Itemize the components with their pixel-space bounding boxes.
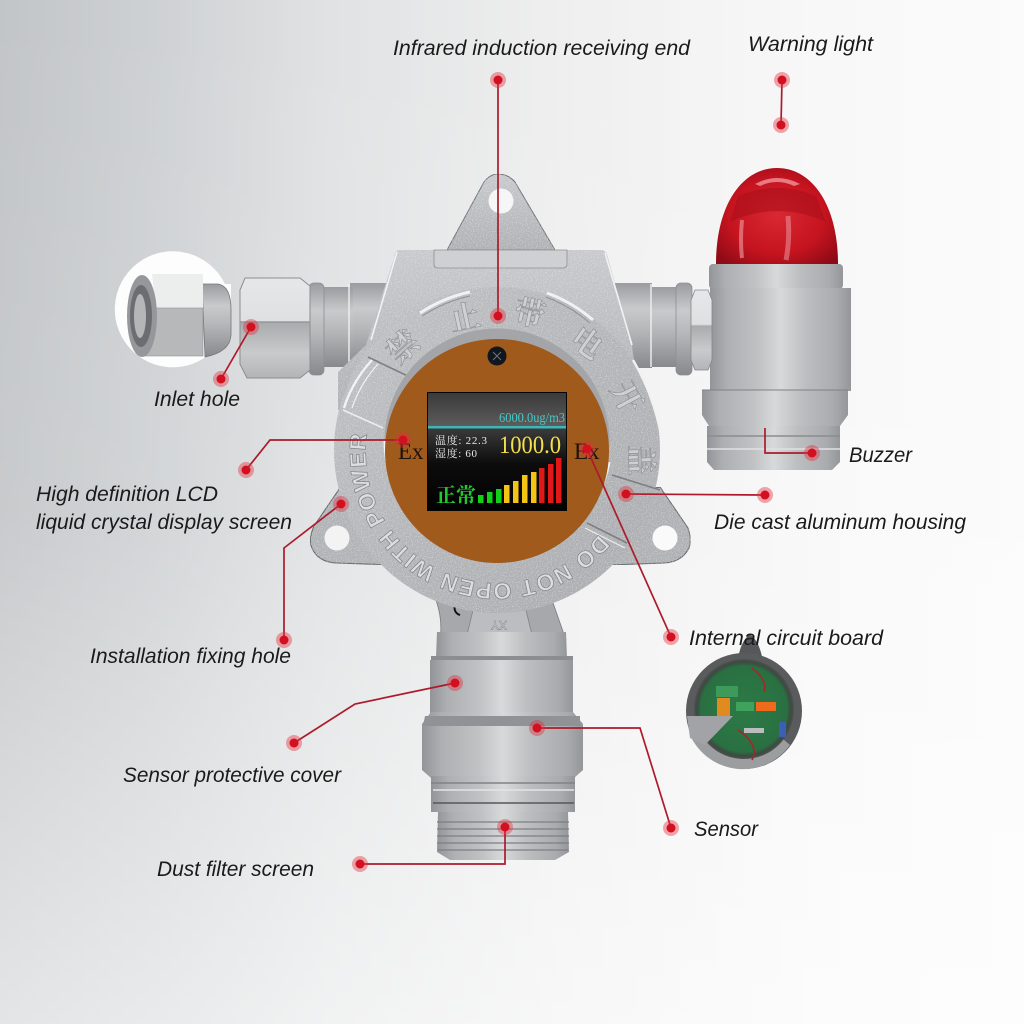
embossed warning characters	[375, 285, 667, 476]
internal circuit board	[686, 634, 802, 769]
embossed warning characters: 禁	[375, 317, 429, 372]
callout: inlet hole	[213, 319, 259, 387]
LCD status: 正常	[436, 479, 476, 508]
callout: die cast housing	[618, 486, 773, 503]
LCD temperature and humidity: 湿度: 60	[435, 446, 478, 460]
label: installation fixing hole: Installation fixing hole	[90, 645, 291, 668]
upper inner bevel	[384, 328, 610, 554]
ring segment dividers	[343, 357, 660, 548]
inlet pipe left	[309, 283, 390, 375]
label: inlet hole: Inlet hole	[154, 388, 240, 411]
label: warning light: Warning light	[748, 33, 874, 56]
label: buzzer: Buzzer	[849, 444, 913, 467]
hex nut right	[691, 290, 712, 370]
embossed warning text: DO NOT OPEN WITH POWER	[349, 434, 610, 600]
embossed warning characters: 开	[602, 372, 656, 420]
callout: installation fixing hole	[276, 496, 349, 648]
label: sensor: Sensor	[694, 818, 759, 841]
label: sensor protective cover: Sensor protective cover	[123, 764, 342, 787]
callout: internal circuit board	[579, 441, 679, 645]
callout: warning light	[773, 72, 790, 133]
embossed warning characters: 带	[510, 285, 550, 336]
embossed warning characters: 电	[563, 314, 614, 368]
callout: sensor protective cover	[286, 675, 463, 751]
callout: dust filter screen	[352, 819, 513, 872]
LCD reading: 1000.0	[499, 432, 561, 459]
sensor assembly	[422, 632, 583, 860]
label: LCD screen: liquid crystal display screen	[36, 511, 292, 534]
label: LCD screen	[36, 483, 292, 534]
label: die cast aluminum housing: Die cast aluminum housing	[714, 511, 966, 534]
LCD temperature and humidity: 温度: 22.3	[435, 433, 488, 447]
Ex marks	[398, 439, 600, 464]
magnified inlet fitting circle	[115, 251, 231, 367]
callout: sensor	[529, 720, 679, 836]
red dome	[716, 168, 838, 264]
outlet pipe right	[610, 283, 692, 375]
LCD level bars	[478, 458, 562, 503]
label: LCD screen: High definition LCD	[36, 483, 218, 506]
callout: LCD screen	[238, 432, 411, 478]
lower mounting lugs	[310, 482, 690, 565]
aluminum housing body	[338, 250, 640, 410]
callout: buzzer	[765, 428, 820, 461]
ring raised rims	[344, 292, 660, 430]
front ring cover	[334, 285, 667, 613]
embossed warning characters: 止	[445, 289, 484, 340]
sensor neck: XY	[491, 618, 507, 632]
label: internal circuit board: Internal circuit board	[689, 627, 884, 650]
warning light assembly	[691, 168, 851, 470]
LCD screen	[427, 392, 567, 511]
sensor neck	[436, 600, 566, 640]
orange face plate	[385, 339, 609, 563]
infrared receiver	[488, 346, 506, 366]
top mounting lug	[447, 174, 555, 250]
label: infrared induction receiving end: Infrared induction receiving end	[393, 37, 691, 60]
Ex marks: Ex	[398, 439, 424, 464]
LCD temperature and humidity	[435, 433, 488, 460]
Ex marks: Ex	[574, 439, 600, 464]
lit inner rim	[385, 440, 609, 554]
embossed warning characters: 盖	[620, 444, 667, 476]
hex nut on inlet	[240, 278, 310, 378]
LCD range value: 6000.0ug/m3	[499, 411, 565, 426]
callout: infrared receiver	[490, 72, 506, 324]
label: dust filter screen: Dust filter screen	[157, 858, 314, 881]
